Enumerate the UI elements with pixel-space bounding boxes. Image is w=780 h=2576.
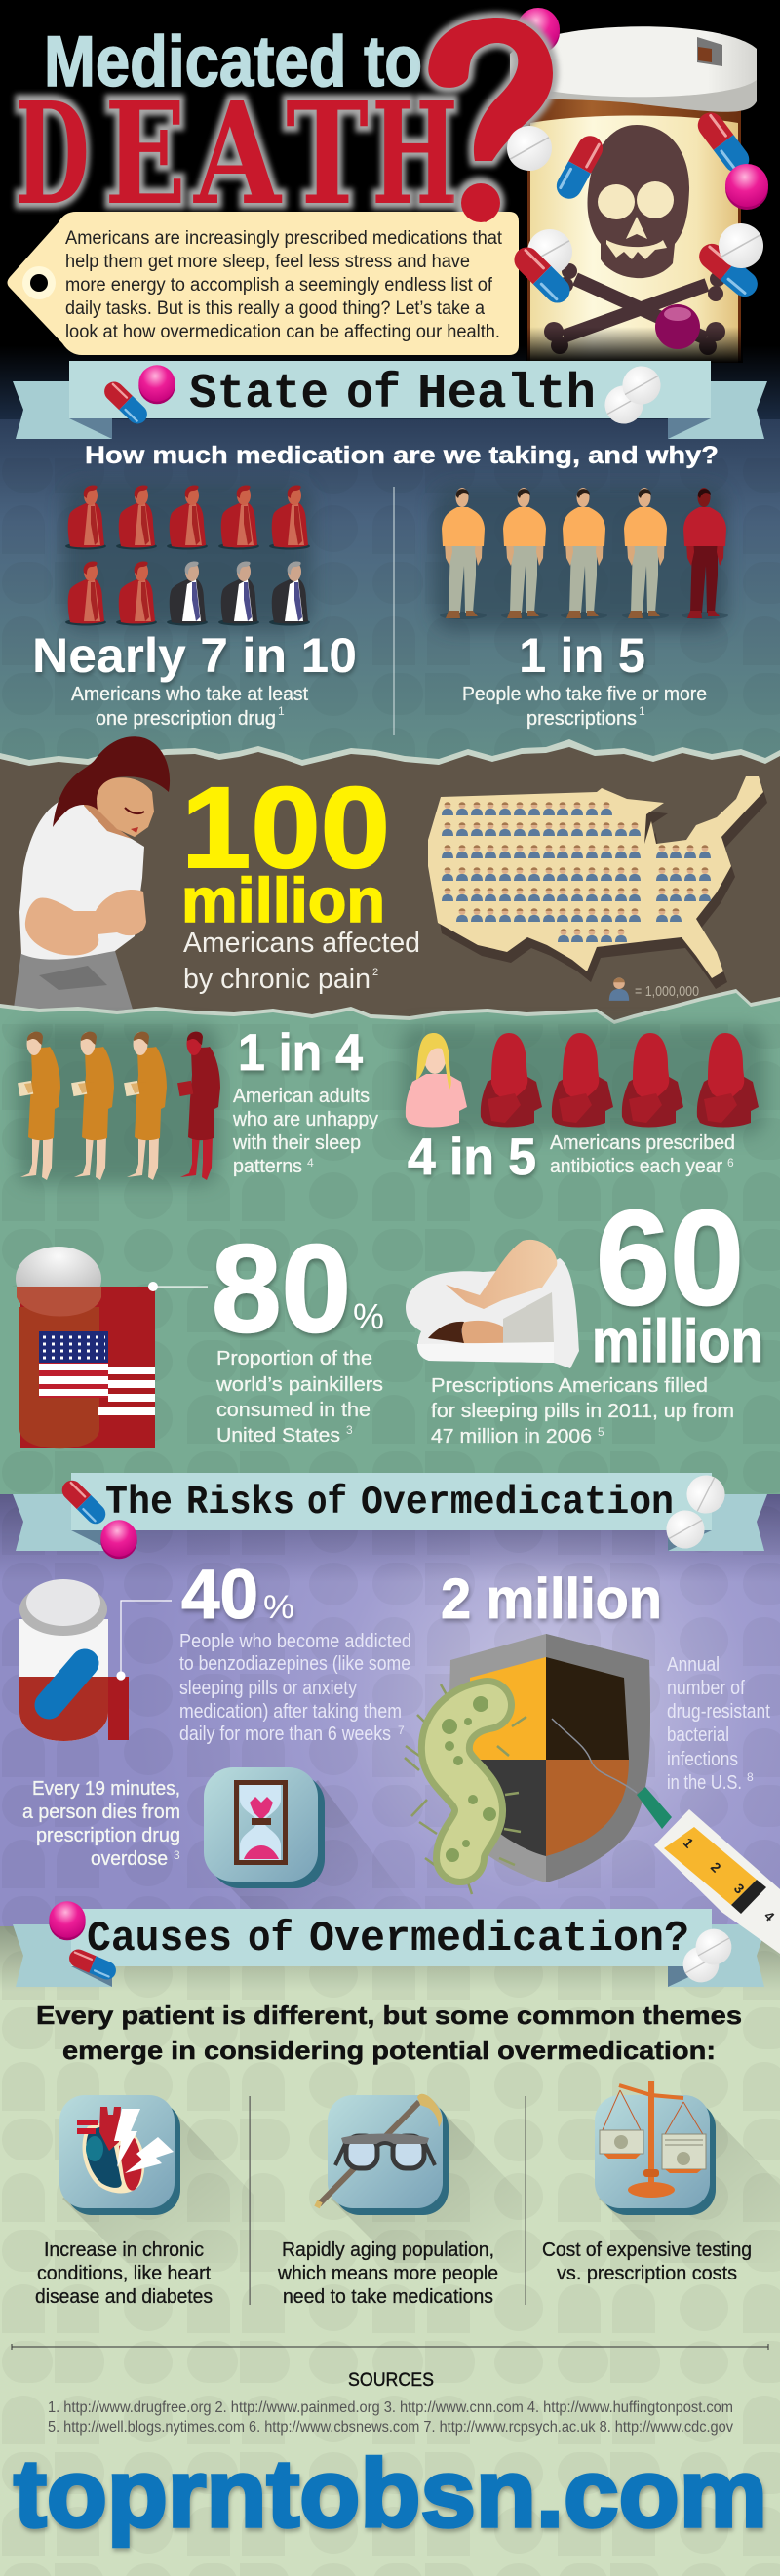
stat: 60 million: 60: [596, 1183, 744, 1333]
heading: Overmedication: [361, 1481, 674, 1526]
legend: = 1,000,000: [635, 983, 699, 1000]
caption: Prescriptions Americans filled: [431, 1375, 708, 1397]
heading: Risks: [186, 1481, 294, 1526]
caption: United States: [216, 1425, 340, 1447]
icon row: robed figures: [18, 1032, 220, 1180]
divider: [250, 2096, 251, 2305]
heading: every patient: emerge in considering potential overmedication:: [62, 2036, 716, 2065]
ribbon: The Risks of Overmedication: [13, 1467, 767, 1559]
caption: 5: [598, 1425, 604, 1439]
illustration: syringe: 1: [681, 1835, 697, 1851]
heading: State: [189, 367, 329, 422]
caption: [183, 928, 420, 995]
caption: sleeping pills or anxiety: [179, 1678, 357, 1699]
panel: 80 percent painkillers: [0, 1219, 384, 1452]
caption: [22, 1778, 180, 1870]
illustration: woman in pain: [12, 736, 170, 1022]
stat: 2 million: 2 million: [441, 1567, 662, 1631]
source list: 1. http://www.drugfree.org 2. http://www.painmed.org 3. http://www.cnn.com 4. http://www.huffingtonpost.com: [48, 2399, 733, 2416]
title glow: DEATH: [15, 71, 458, 236]
heading: Overmedication?: [309, 1915, 689, 1963]
illustration: bacterium: [405, 1684, 526, 1894]
illustration: sleeper under pillow: [406, 1240, 579, 1368]
intro text: Americans are increasingly prescribed medications that: [65, 228, 503, 249]
panel: chronic conditions: [35, 2095, 254, 2308]
illustration: shield: [448, 1634, 650, 1882]
stat: 100 million: 100: [181, 764, 390, 892]
ribbon: State of Health: [13, 361, 767, 439]
caption: a person dies from: [22, 1802, 180, 1823]
caption: overdose: [91, 1848, 168, 1870]
caption: 8: [747, 1770, 754, 1784]
title: DEATH: H: [371, 71, 458, 236]
panel: header title and intro: [8, 8, 768, 363]
caption: Cost of expensive testing: [542, 2239, 752, 2261]
caption: [179, 1631, 411, 1745]
icon row: women: [406, 1033, 759, 1128]
caption: 1: [639, 704, 645, 718]
icon: hourglass tile: [204, 1767, 410, 1922]
caption: prescription drug: [36, 1825, 180, 1846]
caption: world’s painkillers: [215, 1374, 383, 1396]
caption: conditions, like heart: [37, 2263, 211, 2284]
caption: one prescription drug: [96, 708, 276, 730]
heading: every patient: [36, 2001, 742, 2065]
caption: to benzodiazepines (like some: [179, 1653, 410, 1675]
caption: who are unhappy: [232, 1109, 378, 1130]
connector: [148, 1282, 208, 1291]
panel: every 19 minutes: [22, 1767, 410, 1922]
caption: Annual: [667, 1654, 720, 1676]
heading: of: [307, 1481, 347, 1526]
intro text: look at how overmedication can be affecting our health.: [65, 322, 500, 342]
caption: 4: [307, 1156, 314, 1169]
icon row: businessmen: [65, 485, 310, 626]
caption: 3: [174, 1848, 180, 1862]
icon: heart tile: [59, 2095, 254, 2263]
caption: number of: [667, 1678, 745, 1699]
caption: consumed in the: [216, 1400, 370, 1421]
stat: 80 percent: 80: [212, 1219, 351, 1359]
stat: 60 million: [592, 1183, 763, 1375]
icon row: standing men: [440, 488, 728, 619]
illustration: pill bottle with flag: [0, 1247, 155, 1452]
stat: 40 percent: [181, 1557, 294, 1634]
icon: scales tile: [595, 2081, 780, 2263]
title: DEATH: A: [192, 71, 283, 236]
caption: [215, 1348, 383, 1447]
sources: [48, 2370, 733, 2436]
illustration: syringe: [552, 1719, 780, 1954]
divider line: [394, 487, 395, 735]
caption: which means more people: [277, 2263, 498, 2284]
skull and crossbones: [544, 125, 725, 355]
connector: [117, 1601, 172, 1680]
icon: glasses and cane tile: [317, 2094, 522, 2263]
title: DEATH: D: [15, 71, 90, 236]
caption: American adults: [233, 1086, 370, 1107]
intro text: [65, 228, 503, 342]
footer brand: toprntobsn.com: [14, 2439, 767, 2547]
caption: 6: [727, 1156, 734, 1169]
caption: 7: [398, 1724, 405, 1737]
title glow: DEATH: T: [286, 71, 369, 236]
title glow: DEATH: H: [371, 71, 458, 236]
intro tag: [8, 183, 519, 355]
stat: 100 million: million: [181, 865, 385, 935]
panel: 1 in 4 sleep: [18, 1024, 378, 1184]
divider rule: [12, 2344, 768, 2350]
heading: of: [346, 367, 401, 422]
caption: vs. prescription costs: [557, 2263, 737, 2284]
caption: for sleeping pills in 2011, up from: [431, 1401, 734, 1422]
heading: How much medication: How much medication are we taking, and why?: [85, 442, 719, 469]
stat: nearly 7 in 10: Nearly 7 in 10: [32, 628, 357, 683]
caption: [232, 1086, 378, 1177]
panel: 1 in 5: [434, 486, 728, 730]
heading: every patient: Every patient is different, but some common themes: [36, 2001, 742, 2030]
title: Medicated to: Medicated to: [44, 22, 422, 101]
caption: Every 19 minutes,: [32, 1778, 180, 1800]
intro text: daily tasks. But is this really a good thing? Let’s take a: [65, 298, 485, 319]
caption: Increase in chronic: [44, 2239, 204, 2261]
prescription bottle: [510, 26, 757, 363]
heading: Health: [417, 367, 596, 422]
ribbon pills: [100, 365, 662, 428]
ribbon pills: [58, 1467, 733, 1559]
caption: Americans affected: [183, 928, 420, 959]
heading: [87, 1915, 689, 1963]
ribbon pills: [49, 1901, 733, 1984]
title glow: DEATH: D: [15, 71, 90, 236]
caption: with their sleep: [232, 1132, 361, 1154]
title: DEATH: E: [104, 71, 186, 236]
caption: antibiotics each year: [550, 1156, 722, 1177]
caption: daily for more than 6 weeks: [179, 1724, 391, 1745]
title: DEATH: [15, 71, 458, 236]
caption: patterns: [233, 1156, 302, 1177]
panel: cost of testing: [542, 2081, 780, 2284]
background: state of health upper panel: [0, 419, 780, 763]
panel: 40 percent: [20, 1557, 411, 1745]
panel: chronic pain: [0, 736, 780, 1034]
title: DEATH: T: [286, 71, 369, 236]
ribbon: Causes of Overmedication: [13, 1901, 767, 1987]
background: purple panel: [0, 1494, 780, 1928]
background: header: [0, 0, 780, 421]
bottle cap: [510, 26, 757, 112]
panel: nearly 7 in 10: [32, 483, 357, 730]
stat: 1 in 5: 1 in 5: [519, 628, 645, 683]
caption: bacterial: [667, 1724, 729, 1746]
source list: [48, 2399, 733, 2436]
source list: 5. http://well.blogs.nytimes.com 6. http://www.cbsnews.com 7. http://www.rcpsych.ac.uk 8. http://www.cdc.gov: [48, 2419, 733, 2436]
stat: 4 in 5: 4 in 5: [408, 1129, 536, 1186]
caption: 1: [278, 704, 285, 718]
stat: 1 in 4: 1 in 4: [238, 1024, 363, 1082]
illustration: syringe: 3: [731, 1881, 748, 1897]
stat: 100 million: [181, 764, 390, 935]
loose pills around bottle: [505, 107, 768, 349]
caption: 3: [346, 1423, 353, 1437]
caption: [35, 2239, 213, 2308]
caption: Americans who take at least: [71, 684, 308, 705]
caption: medication) after taking them: [179, 1701, 402, 1723]
intro text: help them get more sleep, feel less stress and have: [65, 252, 470, 272]
caption: [667, 1654, 770, 1794]
caption: in the U.S.: [667, 1772, 742, 1794]
caption: [71, 684, 308, 730]
caption: [431, 1375, 734, 1447]
heading: [105, 1481, 674, 1526]
caption: Rapidly aging population,: [282, 2239, 494, 2261]
heading: of: [248, 1915, 293, 1963]
title glow: DEATH: A: [192, 71, 283, 236]
stat: 80 percent: %: [353, 1296, 384, 1336]
heading: The: [105, 1481, 173, 1526]
caption: 2: [372, 967, 378, 978]
panel: 60 million sleeping pills: [406, 1183, 763, 1447]
caption: People who take five or more: [462, 684, 707, 705]
caption: need to take medications: [283, 2286, 493, 2308]
pink pill behind question mark: [517, 8, 560, 54]
title glow: DEATH: E: [104, 71, 186, 236]
caption: [550, 1132, 735, 1177]
illustration: pill bottle: [20, 1579, 129, 1741]
background: causes panel: [0, 1926, 780, 2576]
intro text: more energy to accomplish a seemingly endless list of: [65, 275, 493, 296]
illustration: syringe: 4: [761, 1908, 778, 1924]
caption: People who become addicted: [179, 1631, 411, 1652]
caption: [462, 684, 707, 730]
caption: disease and diabetes: [35, 2286, 213, 2308]
caption: infections: [667, 1749, 738, 1770]
panel: 2 million: [405, 1567, 770, 1894]
stat: 40 percent: %: [263, 1589, 294, 1626]
heading: [189, 367, 596, 422]
divider: [525, 2096, 526, 2305]
panel: aging population: [277, 2094, 522, 2308]
legend: [609, 977, 699, 1001]
stat: 40 percent: 40: [181, 1557, 258, 1634]
caption: Proportion of the: [216, 1348, 372, 1369]
panel: 4 in 5 antibiotics: [402, 1026, 764, 1186]
caption: Americans prescribed: [550, 1132, 735, 1154]
caption: by chronic pain: [183, 964, 370, 995]
chart: US map of people: [428, 776, 767, 1001]
sources heading: SOURCES: [348, 2370, 434, 2391]
background: green panel: [0, 989, 780, 1502]
caption: [542, 2239, 752, 2284]
caption: prescriptions: [526, 708, 637, 730]
heading: Causes: [87, 1915, 232, 1963]
illustration: syringe: 2: [708, 1859, 724, 1876]
question mark: [428, 18, 553, 221]
people grid: [442, 802, 711, 942]
caption: [277, 2239, 498, 2308]
caption: 47 million in 2006: [431, 1426, 592, 1447]
